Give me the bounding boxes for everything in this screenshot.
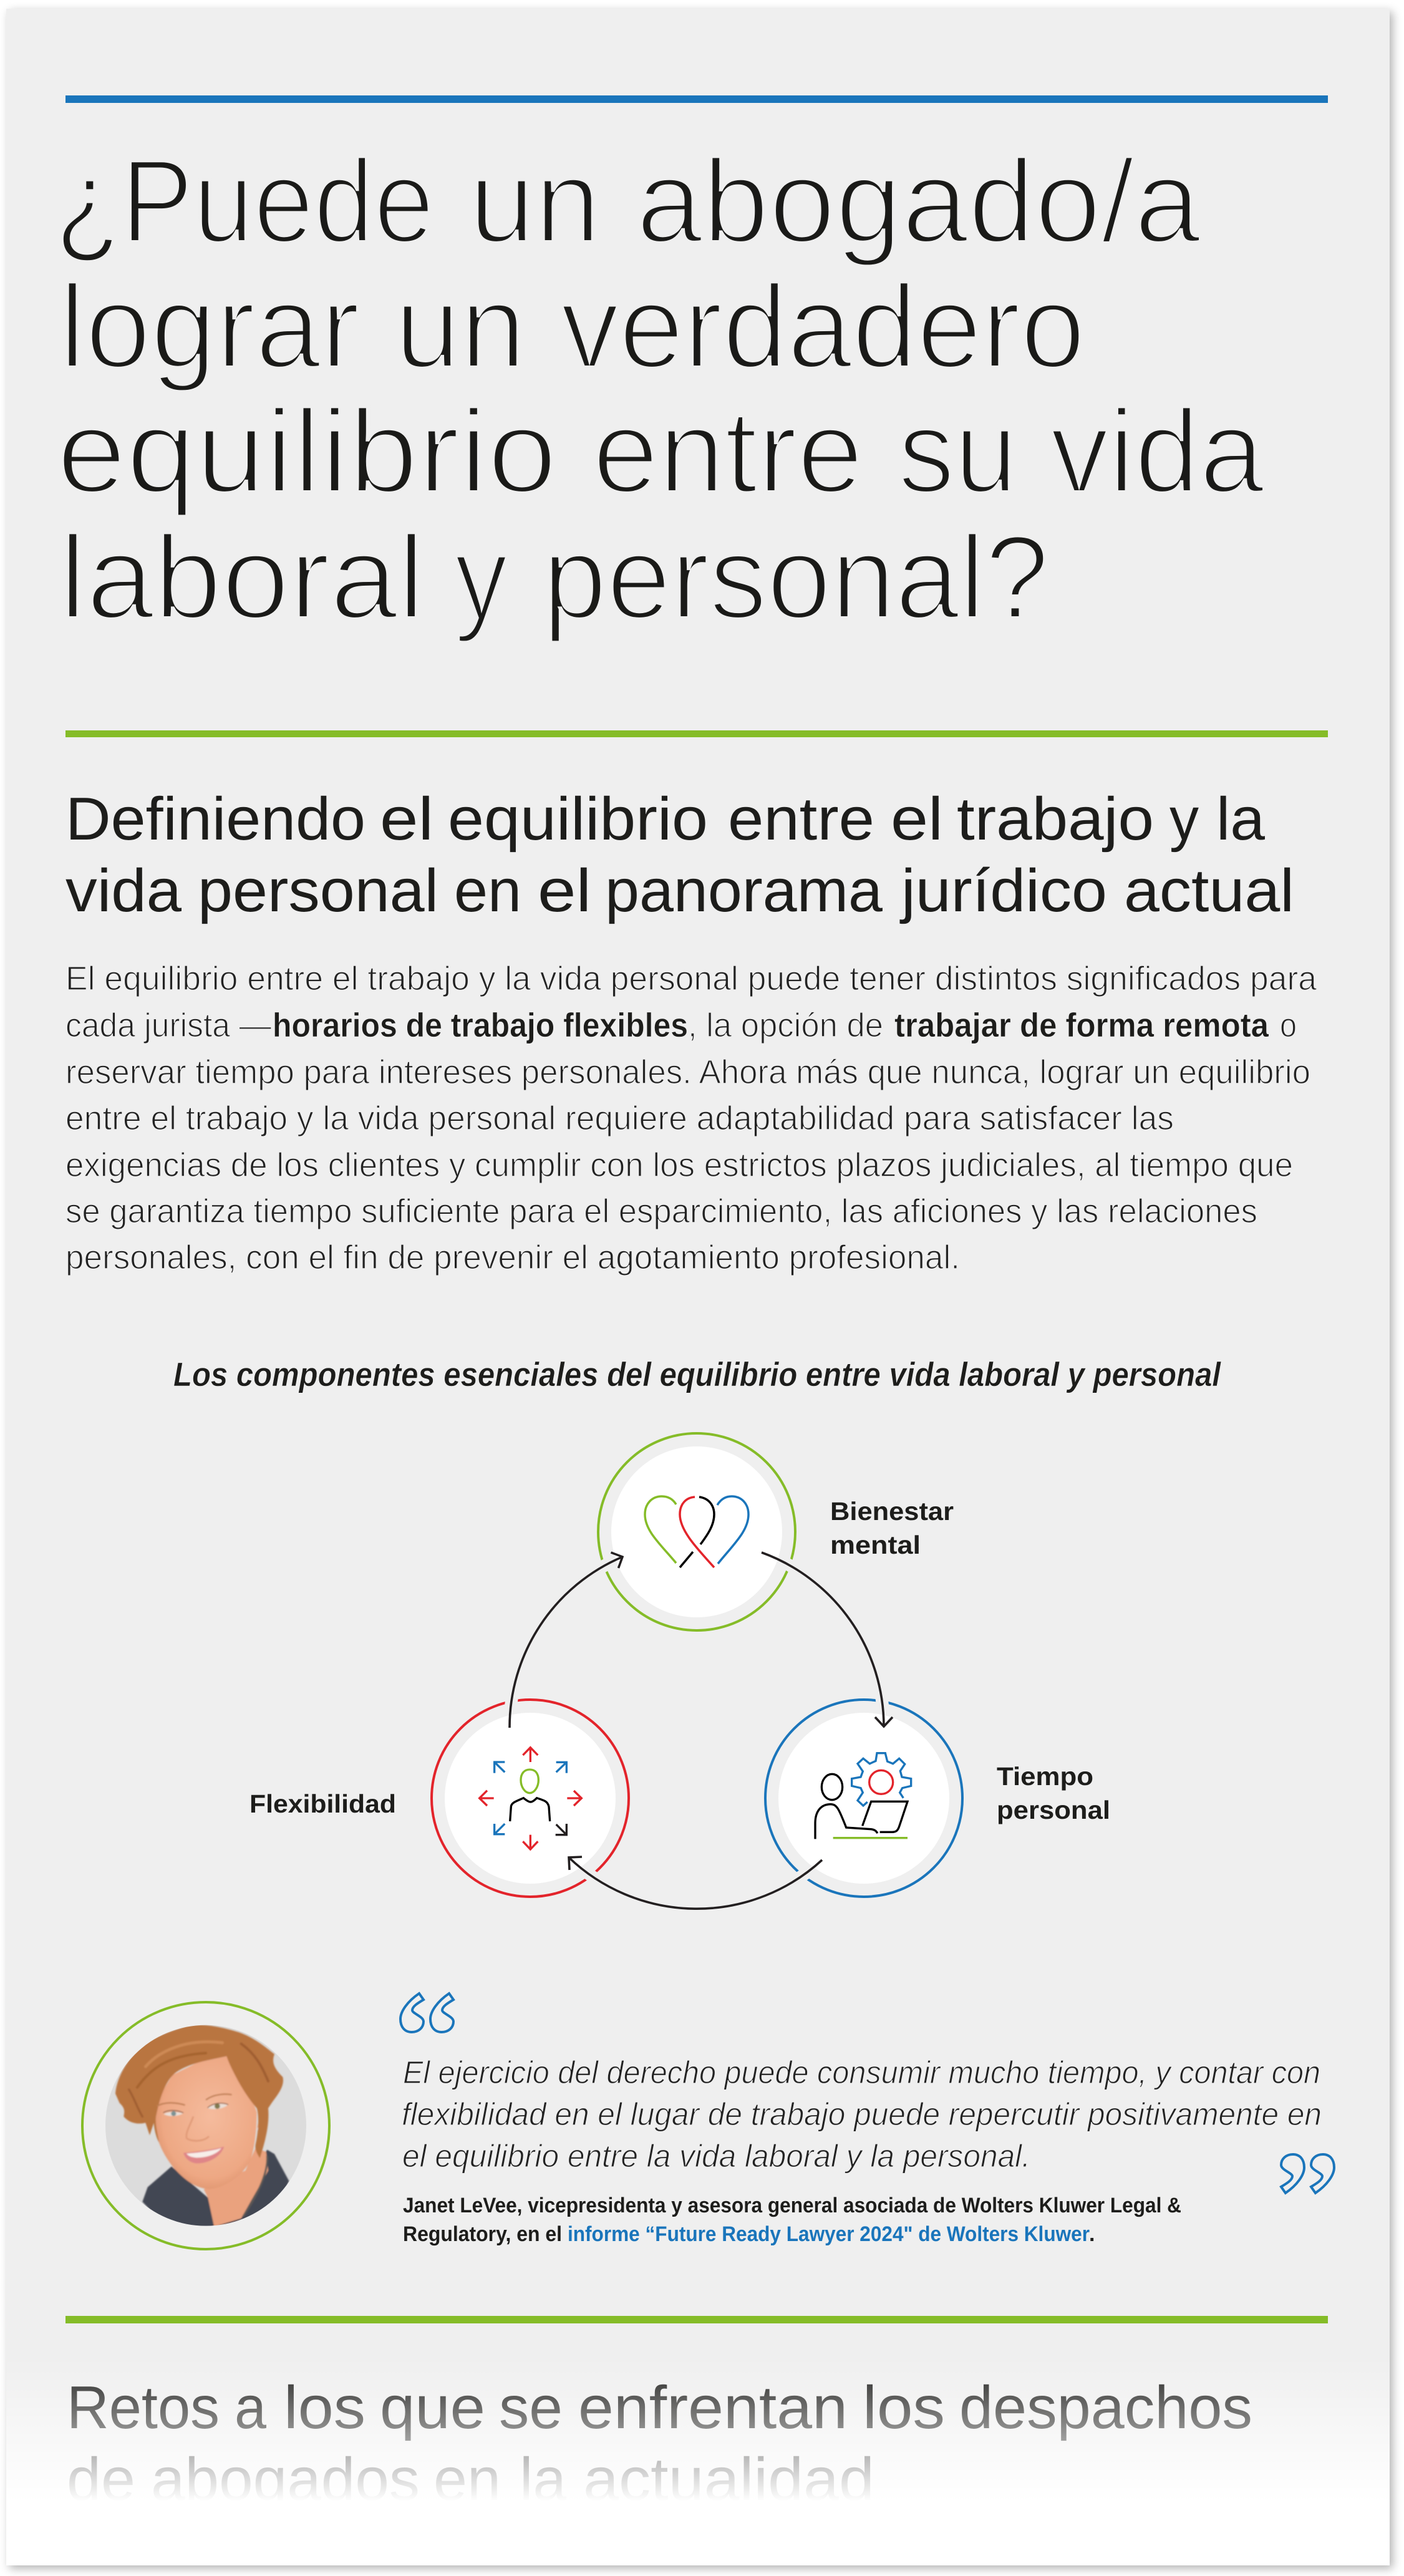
portrait [82,2002,329,2249]
section heading: el [380,785,433,853]
quote text: el equilibrio entre la vida laboral y la personal. [402,2138,1030,2174]
body paragraph: trabajar de forma remota [894,1007,1269,1044]
body paragraph: reservar tiempo para intereses personales. Ahora más que nunca, lograr un equilibrio [65,1053,1310,1091]
section heading: jurídico [899,856,1107,924]
title: equilibrio [57,385,557,518]
arrow: flexibilidad to bienestar [510,1552,622,1728]
next section heading (fading out): de [67,2445,135,2513]
body paragraph: entre el trabajo y la vida personal requiere adaptabilidad para satisfacer las [65,1100,1174,1137]
section heading: panorama [605,856,883,924]
next section heading (fading out): que [380,2373,485,2441]
icon: intertwined hearts [645,1496,748,1567]
next section heading (fading out): la [520,2445,566,2513]
section heading: la [1216,785,1265,853]
title: laboral [59,511,425,644]
next section heading (fading out): enfrentan [578,2373,848,2441]
section heading: personal [198,856,438,924]
section heading: el [891,785,943,853]
body paragraph: personales, con el fin de prevenir el agotamiento profesional. [65,1239,960,1276]
section heading: entre [728,785,874,853]
white disc: tiempo personal [778,1713,949,1884]
title: vida [1050,385,1264,518]
title: lograr [59,261,360,393]
white fade overlay [6,2358,1390,2565]
arrow: bienestar to tiempo personal [762,1552,893,1726]
label: bienestar mental: mental [830,1531,921,1559]
label: tiempo personal [997,1762,1110,1824]
section heading: Definiendo [65,785,366,853]
title: un [395,261,526,393]
top blue rule [65,95,1328,103]
section heading: actual [1124,856,1294,924]
section heading: en [454,856,521,924]
white disc: flexibilidad [445,1713,616,1884]
section heading: y [1169,785,1199,853]
body paragraph: exigencias de los clientes y cumplir con los estrictos plazos judiciales, al tiempo que [65,1146,1293,1184]
quote text [402,2055,1322,2174]
icon: opening quotation mark [400,1993,453,2032]
photo: woman with short auburn hair [104,2023,307,2229]
section heading: equilibrio [448,785,708,853]
label: tiempo personal: personal [997,1796,1110,1824]
next section heading (fading out): actualidad [583,2445,874,2513]
icon: closing quotation mark [1281,2154,1334,2193]
title: su [898,385,1017,518]
icon: person with arrows [480,1748,581,1849]
diagram caption: Los componentes esenciales del equilibrio entre vida laboral y personal [173,1356,1221,1393]
next section heading (fading out): los [284,2373,366,2441]
attribution: informe “Future Ready Lawyer 2024" de Wolters Kluwer [568,2222,1090,2246]
ring: bienestar mental [598,1433,795,1630]
title: y [455,511,508,644]
next section heading (fading out): en [433,2445,501,2513]
section heading: vida [65,856,182,924]
cycle diagram [249,1433,1110,1909]
green rule [65,730,1328,737]
arrow: tiempo personal to flexibilidad [569,1857,822,1909]
section heading: trabajo [957,785,1154,853]
title: verdadero [561,261,1085,393]
quote text: El ejercicio del derecho puede consumir mucho tiempo, y contar con [403,2055,1320,2090]
ring gaps under arrows [510,1552,884,1909]
label: tiempo personal: Tiempo [997,1762,1093,1791]
attribution: Janet LeVee, vicepresidenta y asesora general asociada de Wolters Kluwer Legal & [403,2194,1181,2217]
body paragraph: se garantiza tiempo suficiente para el esparcimiento, las aficiones y las relaciones [65,1193,1257,1230]
body paragraph: , la opción de [688,1007,883,1044]
body paragraph [65,960,1317,1276]
next section heading (fading out): los [863,2373,945,2441]
white disc: bienestar mental [611,1446,782,1617]
title: personal? [543,511,1049,644]
bottom green rule [65,2316,1328,2323]
label: flexibilidad: Flexibilidad [249,1789,396,1818]
label: bienestar mental [830,1497,954,1559]
portrait ring [82,2002,329,2249]
body paragraph: o [1280,1007,1297,1044]
body paragraph: cada jurista — [65,1007,271,1044]
quote text: flexibilidad en el lugar de trabajo puede repercutir positivamente en [402,2096,1322,2132]
next section heading (fading out): despachos [959,2373,1252,2441]
next section heading (fading out): a [235,2373,266,2441]
ring: flexibilidad [432,1700,629,1897]
section heading: el [538,856,591,924]
body paragraph: horarios de trabajo flexibles [273,1007,688,1044]
next section heading (fading out): abogados [151,2445,420,2513]
title [55,135,1264,644]
icon: person at laptop with gear [815,1753,911,1839]
body paragraph: El equilibrio entre el trabajo y la vida personal puede tener distintos significados para [65,960,1317,997]
next section heading (fading out): Retos [67,2373,220,2441]
title: ¿Puede [55,135,434,268]
attribution [403,2194,1181,2246]
label: bienestar mental: Bienestar [830,1497,954,1526]
next section heading (fading out) [67,2373,1252,2513]
title: entre [593,385,863,518]
attribution: . [1089,2222,1095,2246]
title: abogado/a [636,135,1201,268]
attribution: Regulatory, en el [403,2222,562,2246]
next section heading (fading out): se [499,2373,563,2441]
title: un [469,135,601,268]
section heading [65,785,1294,924]
pull quote [400,1993,1334,2246]
ring: tiempo personal [765,1700,962,1897]
